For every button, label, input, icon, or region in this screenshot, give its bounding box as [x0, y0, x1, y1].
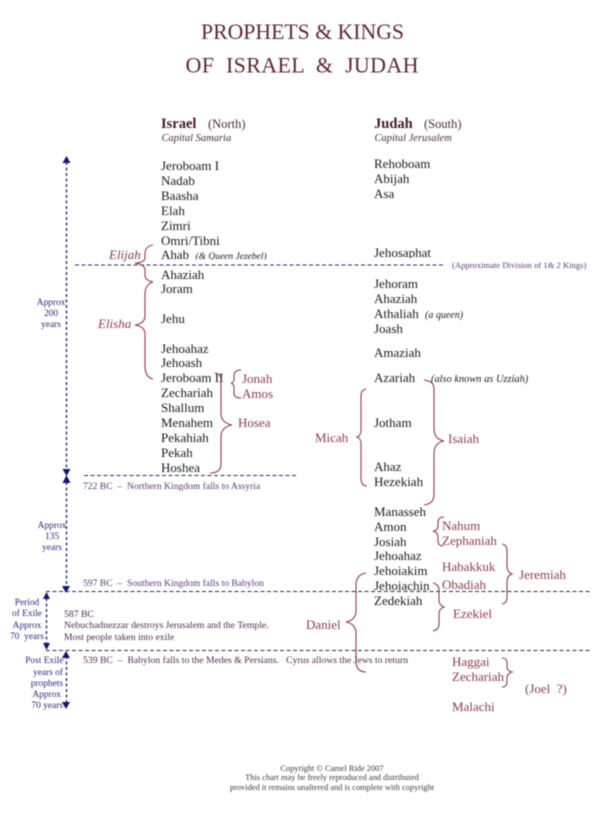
period label: exile: 70 years	[10, 632, 44, 642]
kings of Israel: Ahaziah	[161, 267, 205, 282]
period label: 135 years: Approx	[38, 521, 67, 531]
copyright footer	[230, 764, 435, 792]
kings of Israel: Ahab (& Queen Jezebel)	[161, 247, 267, 262]
kings of Israel: Jehoash	[161, 355, 203, 370]
heading: Judah column: Capital Jerusalem	[374, 133, 452, 144]
kings of Judah: Azariah	[374, 370, 416, 385]
heading: Israel column	[161, 116, 246, 144]
prophet names: Elisha	[97, 316, 132, 331]
kings of Judah: Amaziah	[374, 345, 421, 360]
kings of Israel: Joram	[161, 281, 193, 296]
period label: exile	[10, 598, 44, 642]
prophet names: Ezekiel	[453, 606, 492, 621]
kings of Israel: Zimri	[161, 218, 191, 233]
period label: 135 years	[38, 521, 67, 553]
heading: Israel column: (North)	[208, 117, 246, 131]
period label: post exile: years of	[33, 667, 64, 678]
kings of Israel: Menahem	[161, 415, 213, 430]
event notes: 539 BC – Babylon falls to the Medes & Persians. Cyrus allows the Jews to return	[83, 655, 408, 666]
period label: post exile: 70 years	[32, 701, 63, 711]
prophet names: Zechariah	[452, 669, 504, 684]
title: PROPHETS & KINGS	[201, 19, 404, 44]
copyright footer: provided it remains unaltered and is complete with copyright	[230, 783, 435, 792]
event notes: (Approximate Division of 1& 2 Kings)	[452, 260, 587, 270]
period label: post exile: Post Exile	[25, 656, 64, 666]
kings of Israel: Shallum	[161, 400, 204, 415]
kings of Judah: Jotham	[374, 415, 412, 430]
period label: post exile	[25, 656, 64, 711]
heading: Judah column	[374, 116, 462, 144]
kings of Israel	[161, 158, 267, 475]
clipped text mask at division line	[160, 258, 440, 264]
event notes: Most people taken into exile	[64, 632, 174, 643]
period label: exile: Approx	[13, 621, 42, 631]
timeline arrows	[43, 156, 70, 709]
kings of Judah: Hezekiah	[374, 474, 424, 489]
period label: 200 years	[37, 298, 66, 330]
kings of Israel: Elah	[161, 203, 185, 218]
period label: 200 years: Approx	[37, 298, 66, 308]
kings of Judah: Jehoram	[374, 276, 418, 291]
event notes	[64, 260, 587, 666]
kings of Judah: Joash	[374, 321, 403, 336]
kings of Judah: Rehoboam	[374, 156, 430, 171]
prophet braces	[135, 245, 512, 687]
prophet names: Haggai	[452, 654, 490, 669]
kings of Judah: Jehoiachin	[374, 578, 430, 593]
event notes: 722 BC – Northern Kingdom falls to Assyria	[83, 481, 261, 492]
prophet names: Micah	[315, 430, 349, 445]
event notes: Nebuchadnezzar destroys Jerusalem and the Temple.	[64, 620, 269, 631]
heading: Israel column: Capital Samaria	[162, 133, 231, 144]
kings of Judah: Jehosaphat	[374, 245, 431, 260]
prophet names: Elijah	[108, 247, 141, 262]
prophet names: Zephaniah	[442, 533, 497, 548]
kings of Judah	[374, 156, 529, 608]
kings of Judah: (also known as Uzziah)	[431, 374, 529, 385]
prophet names: Isaiah	[448, 431, 480, 446]
kings of Israel: Pekahiah	[161, 430, 209, 445]
kings of Israel: Baasha	[161, 188, 199, 203]
prophet names: (Joel ?)	[525, 681, 567, 696]
kings of Israel: Zechariah	[161, 385, 213, 400]
prophet names: Nahum	[442, 518, 480, 533]
event notes: 587 BC	[64, 609, 94, 620]
kings of Judah: Asa	[374, 186, 394, 201]
event notes: 597 BC – Southern Kingdom falls to Babylon	[83, 578, 264, 589]
kings of Israel: Jehoahaz	[161, 341, 209, 356]
prophet names: Daniel	[306, 617, 341, 632]
kings of Israel: Jeroboam I	[161, 158, 219, 173]
title: OF ISRAEL & JUDAH	[186, 52, 419, 78]
heading: Judah column: Judah	[374, 116, 413, 132]
kings of Israel: Nadab	[161, 173, 195, 188]
kings of Israel: Jeroboam II	[161, 370, 223, 385]
kings of Judah: Amon	[374, 519, 407, 534]
period label: post exile: Approx	[32, 690, 61, 700]
prophet names: Obadiah	[442, 577, 487, 592]
period label: exile: of Exile	[12, 608, 42, 619]
kings of Judah: Jehoahaz	[374, 548, 422, 563]
kings of Judah: Athaliah (a queen)	[374, 306, 464, 321]
copyright footer: This chart may be freely reproduced and distributed	[245, 773, 420, 782]
prophet names	[97, 247, 567, 714]
heading: Judah column: (South)	[424, 117, 462, 131]
kings of Israel: Jehu	[161, 311, 185, 326]
horizontal period lines	[46, 265, 590, 650]
kings of Judah: Zedekiah	[374, 593, 423, 608]
kings of Israel: Hoshea	[161, 460, 200, 475]
prophet names: Jonah	[242, 371, 273, 386]
kings of Judah: Josiah	[374, 534, 407, 549]
title	[186, 19, 419, 78]
kings of Israel: Pekah	[161, 445, 193, 460]
prophet names: Jeremiah	[519, 567, 566, 582]
period label: 135 years: 135	[45, 532, 59, 542]
prophet names: Malachi	[452, 699, 495, 714]
prophet names: Hosea	[238, 415, 271, 430]
kings of Judah: Ahaziah	[374, 291, 418, 306]
period label: 135 years: years	[42, 543, 62, 553]
kings of Israel: Omri/Tibni	[161, 233, 220, 248]
kings of Judah: Ahaz	[374, 459, 402, 474]
copyright footer: Copyright © Camel Ride 2007	[280, 764, 384, 773]
period label: 200 years: years	[41, 320, 61, 330]
kings of Judah: Abijah	[374, 171, 410, 186]
heading: Israel column: Israel	[161, 116, 196, 132]
period label: 200 years: 200	[44, 309, 58, 319]
kings of Judah: Manasseh	[374, 504, 426, 519]
prophet names: Amos	[242, 386, 273, 401]
period label: post exile: prophets	[31, 679, 63, 689]
period label: exile: Period	[15, 598, 40, 608]
kings of Judah: Jehoiakim	[374, 563, 427, 578]
prophet names: Habakkuk	[442, 559, 496, 574]
